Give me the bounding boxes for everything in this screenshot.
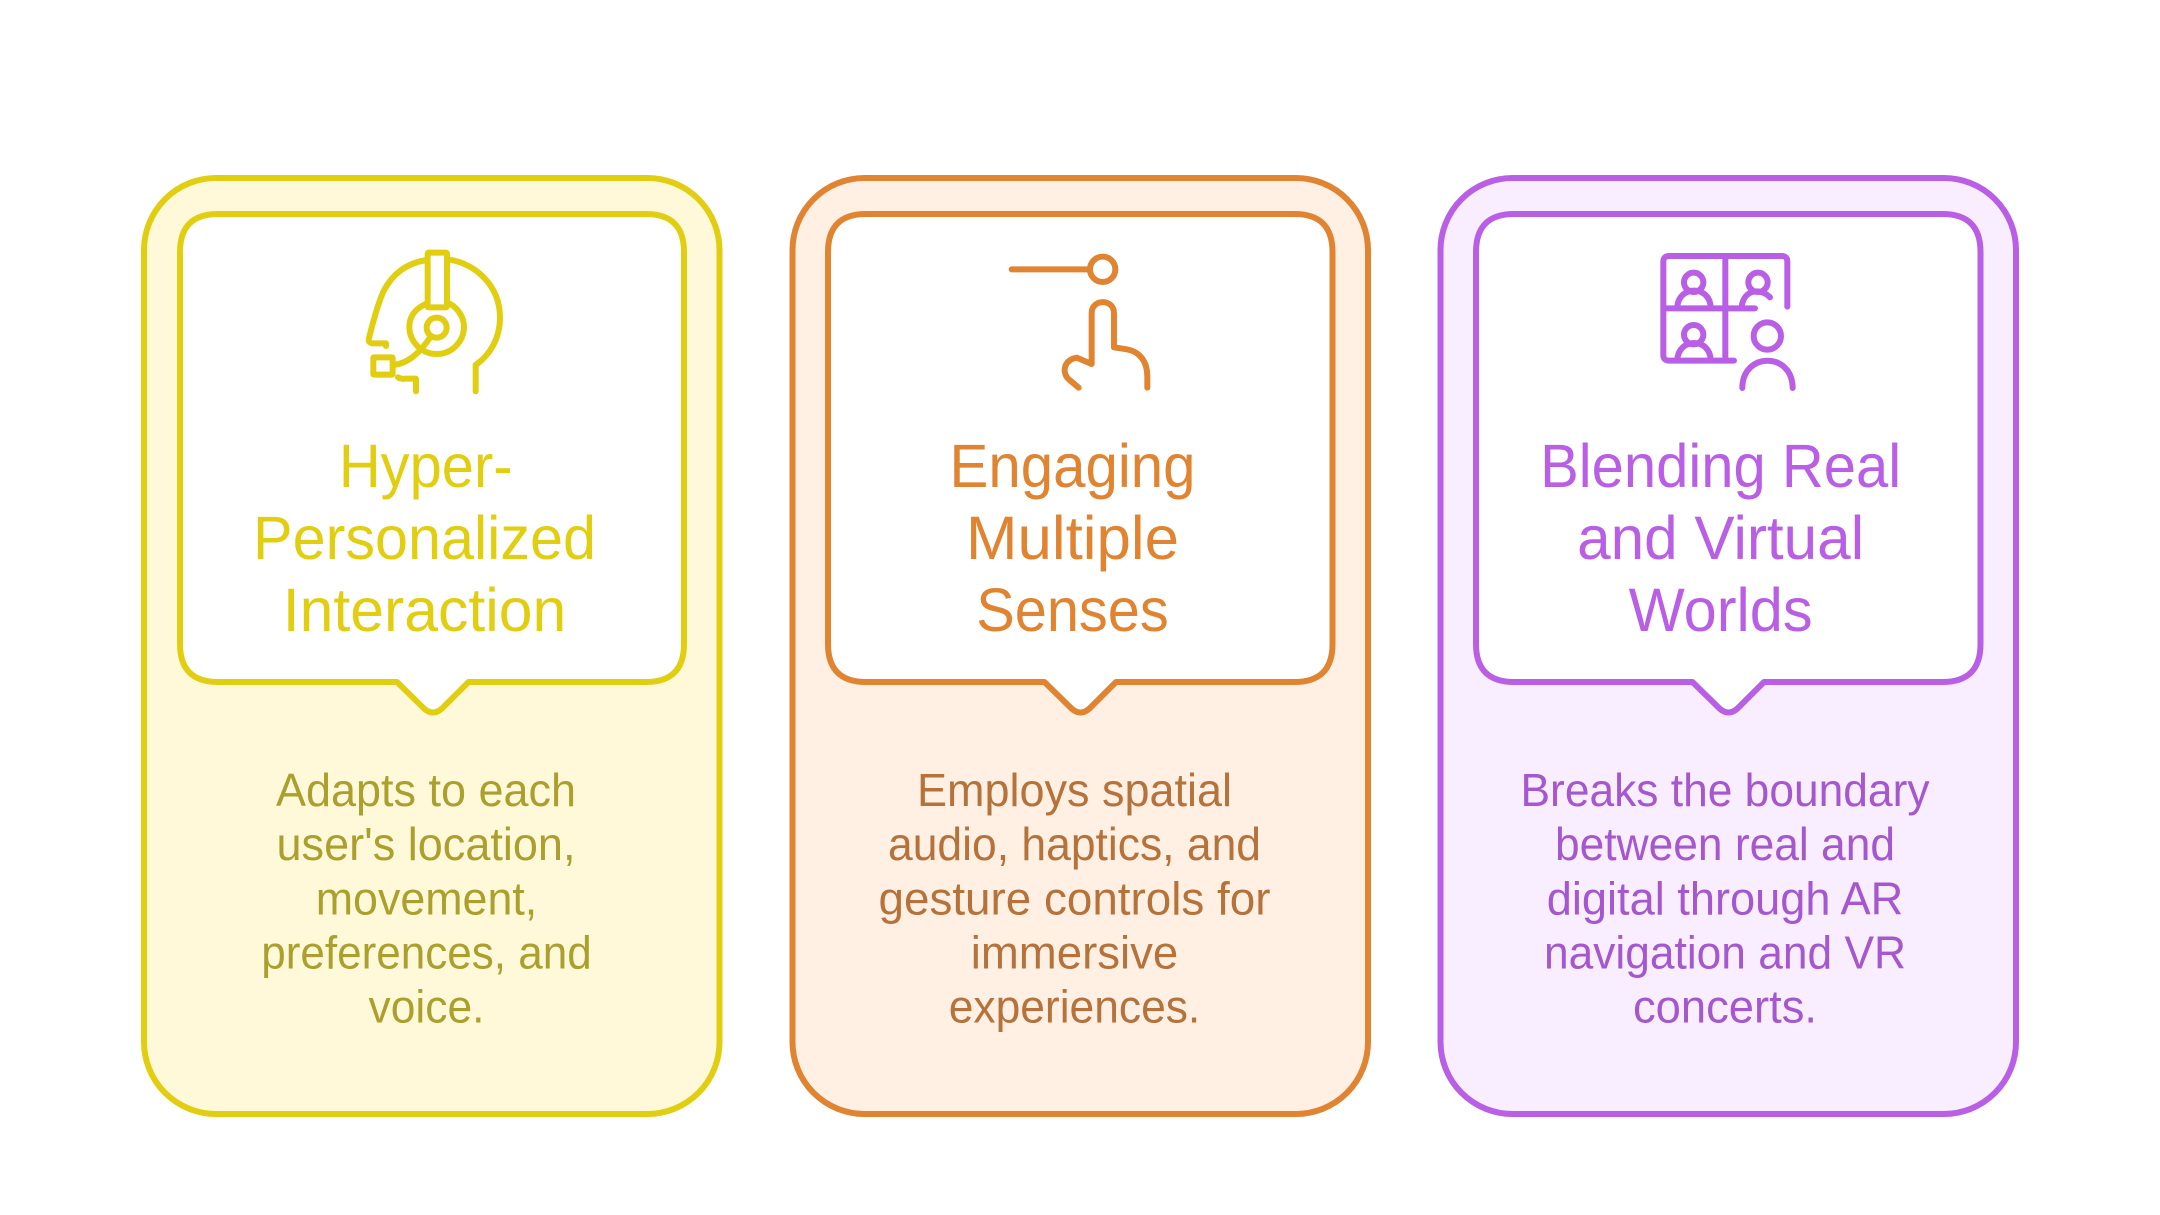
description: movement, bbox=[316, 872, 537, 924]
description bbox=[878, 764, 1270, 1032]
description bbox=[1520, 764, 1930, 1032]
heading: Personalized bbox=[253, 504, 596, 572]
panel: Hyper-Personalized Interaction bbox=[144, 178, 720, 1114]
heading: Interaction bbox=[283, 576, 566, 644]
speech bubble bbox=[180, 214, 684, 712]
icon: video call grid bbox=[1663, 256, 1793, 388]
icon: hand gesture bbox=[1012, 257, 1147, 388]
heading: and Virtual bbox=[1577, 504, 1864, 572]
icon: headset agent bbox=[369, 253, 500, 391]
description: gesture controls for bbox=[878, 872, 1270, 924]
description: preferences, and bbox=[261, 926, 592, 978]
description: concerts. bbox=[1633, 980, 1817, 1032]
heading: Blending Real bbox=[1540, 432, 1901, 500]
heading bbox=[950, 432, 1196, 644]
heading: Multiple bbox=[966, 504, 1179, 572]
panel: Engaging Multiple Senses bbox=[792, 178, 1368, 1114]
description bbox=[261, 764, 592, 1032]
description: between real and bbox=[1555, 818, 1895, 870]
heading: Hyper- bbox=[339, 432, 512, 500]
panel background bbox=[1440, 178, 2016, 1114]
heading: Engaging bbox=[950, 432, 1196, 500]
heading bbox=[253, 432, 596, 644]
description: user's location, bbox=[276, 818, 576, 870]
description: audio, haptics, and bbox=[888, 818, 1261, 870]
description: voice. bbox=[368, 980, 484, 1032]
panel: Blending Real and Virtual Worlds bbox=[1440, 178, 2016, 1114]
description: immersive bbox=[971, 926, 1178, 978]
panel background bbox=[144, 178, 720, 1114]
heading bbox=[1540, 432, 1901, 644]
description: Adapts to each bbox=[276, 764, 576, 816]
speech bubble bbox=[828, 214, 1332, 712]
panel background bbox=[792, 178, 1368, 1114]
description: navigation and VR bbox=[1544, 926, 1906, 978]
heading: Senses bbox=[976, 576, 1169, 644]
description: digital through AR bbox=[1547, 872, 1903, 924]
heading: Worlds bbox=[1629, 576, 1813, 644]
description: Breaks the boundary bbox=[1520, 764, 1930, 816]
description: experiences. bbox=[949, 980, 1200, 1032]
description: Employs spatial bbox=[917, 764, 1232, 816]
speech bubble bbox=[1476, 214, 1980, 712]
